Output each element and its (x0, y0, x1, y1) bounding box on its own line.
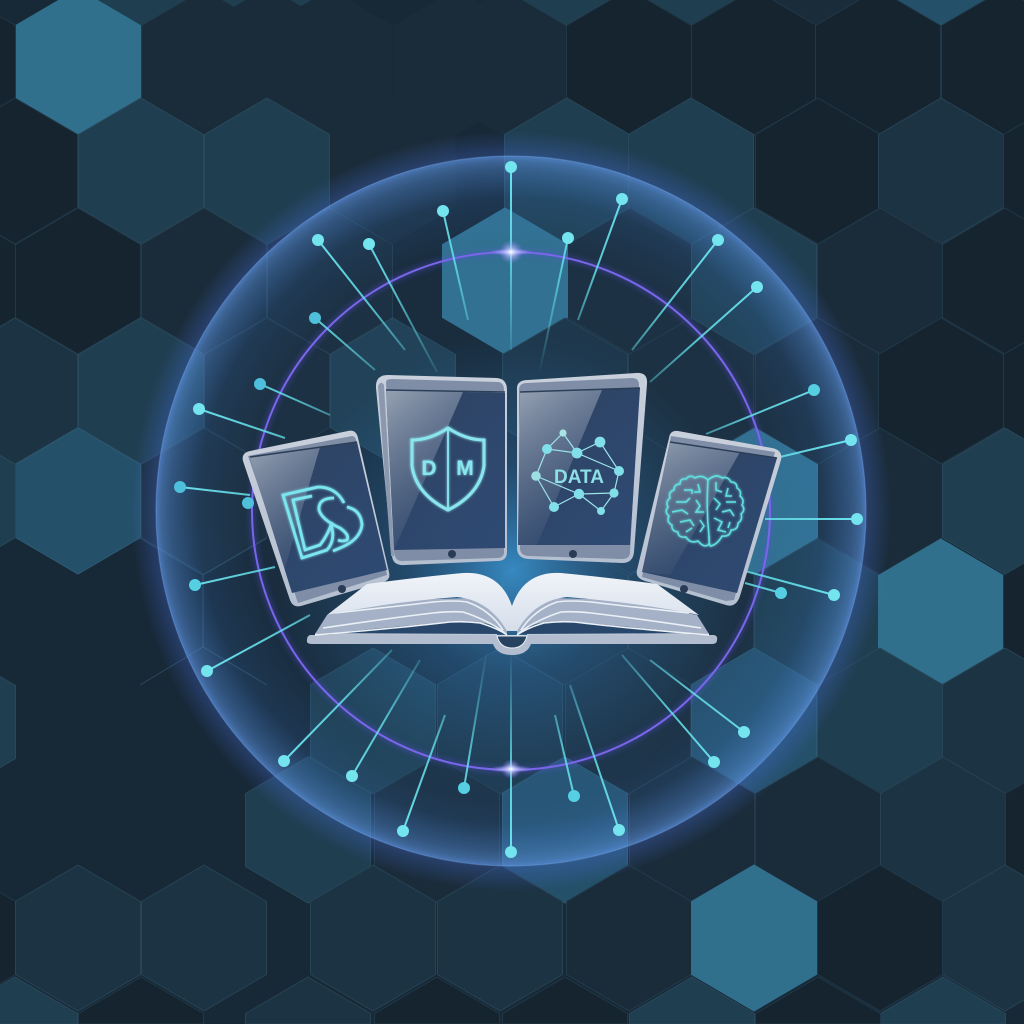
left and right top pages (327, 573, 699, 631)
button (448, 550, 456, 558)
right page stack (517, 598, 709, 635)
tablet: DM shield (376, 375, 507, 565)
connector end dots (174, 161, 863, 858)
icon: shield (412, 428, 484, 510)
glowing sphere (131, 131, 891, 891)
icon: brain (666, 476, 744, 546)
ring sparkle bottom (489, 759, 533, 779)
icon: shield: D (421, 457, 437, 480)
icon: DS logo (283, 487, 362, 558)
button (338, 585, 346, 593)
tablet: DS logo (243, 431, 389, 606)
tablet: DATA network (517, 373, 647, 563)
button (569, 550, 577, 558)
book cover strip (307, 635, 717, 655)
ring sparkle top (489, 240, 533, 264)
icon: shield: M (456, 457, 474, 480)
purple inner ring (252, 252, 770, 770)
radial connector lines (180, 166, 857, 852)
left page stack (315, 598, 507, 635)
icon: network: DATA (554, 467, 604, 488)
tablet: brain (637, 431, 781, 606)
icon: network (531, 429, 624, 515)
open book (307, 573, 717, 655)
button (680, 585, 688, 593)
